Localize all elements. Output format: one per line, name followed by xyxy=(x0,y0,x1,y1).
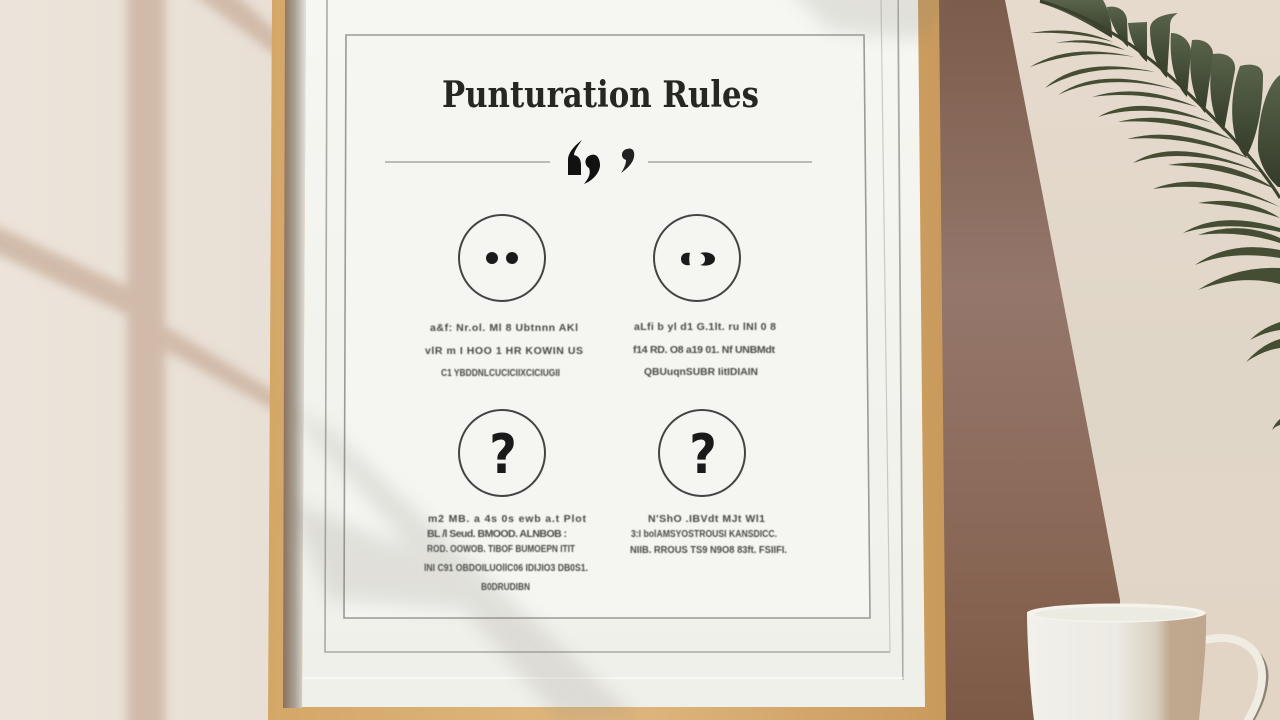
rule 3: text: lNI C91 OBDOILUOllC06 IDIJIO3 DB0S1. xyxy=(424,562,588,574)
window light shadows across poster xyxy=(285,0,960,720)
thin lower leaflets xyxy=(1030,30,1280,430)
rule 1: text: C1 YBDDNLCUCICIIXCICIUGII xyxy=(441,367,560,379)
rule 2: text: QBUuqnSUBR IitIDIAIN xyxy=(644,366,758,378)
rule 2: text: aLfi b yl d1 G.1lt. ru lNl 0 8 xyxy=(634,321,776,333)
left wall with window shadow xyxy=(0,0,285,720)
rule 4: text: 3:I bolAMSYOSTROUSI KANSDICC. xyxy=(631,528,777,540)
rule 2: icon xyxy=(654,215,740,301)
mug body xyxy=(1027,612,1206,720)
rule 4: icon xyxy=(659,410,745,496)
mug handle xyxy=(1205,639,1267,720)
main stem xyxy=(1040,1,1280,198)
rule 4: icon: ? xyxy=(689,423,717,486)
rule 3: text: ROD. OOWOB. TIBOF BUMOEPN ITIT xyxy=(427,543,575,555)
broad upper leaflets xyxy=(1040,0,1280,187)
rule 3: text xyxy=(424,513,588,593)
title: Punturation Rules xyxy=(442,74,759,116)
rule 3: icon xyxy=(459,410,545,496)
divider with quote marks xyxy=(385,140,812,184)
rule 3: text: BL /l Seud. BMOOD. ALNBOB : xyxy=(427,528,567,540)
rule 2: text: f14 RD. O8 a19 01. Nf UNBMdt xyxy=(633,344,776,356)
rule 1: text: a&f: Nr.ol. Ml 8 Ubtnnn AKl xyxy=(430,322,578,334)
rule 4: text: N'ShO .IBVdt MJt Wl1 xyxy=(648,513,765,525)
rule 3: icon: ? xyxy=(489,423,517,486)
rule 1: text: vlR m I HOO 1 HR KOWIN US xyxy=(425,345,583,357)
rule 1: text xyxy=(425,322,583,379)
rule 4: text: NIIB. RROUS TS9 N9O8 83ft. FSIIFI. xyxy=(630,544,787,556)
rule 3: text: B0DRUDIBN xyxy=(481,581,530,593)
mug rim xyxy=(1027,604,1206,622)
right wall xyxy=(935,0,1280,720)
coffee mug xyxy=(1027,604,1267,720)
brown wall shadow xyxy=(935,0,1120,720)
wooden picture frame xyxy=(268,0,946,720)
rule 4: text xyxy=(630,513,787,556)
rule 1: icon xyxy=(459,215,545,301)
poster xyxy=(302,0,925,707)
rule 2: text xyxy=(633,321,776,378)
palm frond xyxy=(1030,0,1280,430)
rule 3: text: m2 MB. a 4s 0s ewb a.t Plot xyxy=(428,513,586,525)
